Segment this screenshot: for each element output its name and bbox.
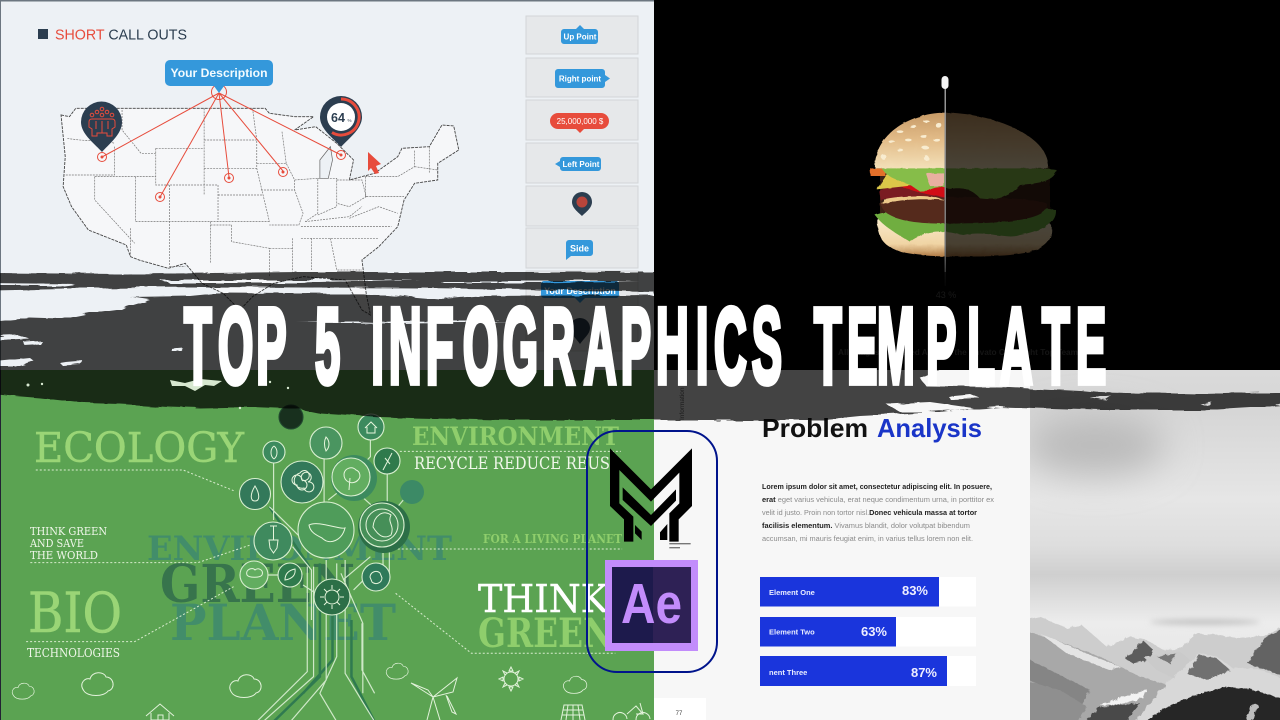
- icon: bicycle: [613, 703, 650, 720]
- logo frame: [587, 431, 717, 672]
- panel: problem analysis slide: [654, 370, 1280, 720]
- burger dimmed half: [946, 100, 1070, 270]
- callout: up point: Up Point: [564, 32, 597, 42]
- page number tab: 77: [676, 711, 683, 717]
- ghost text: GREEN: [160, 554, 355, 615]
- heading: short call outs: SHORT CALL OUTS: [55, 28, 187, 44]
- vertical information label: Information: [679, 387, 686, 420]
- callout: 25,000,000 dollars: [550, 113, 609, 133]
- callout: 25,000,000 dollars: 25,000,000 $: [557, 117, 604, 126]
- callout: left point: [555, 157, 601, 171]
- heading: bio: BIO: [28, 581, 122, 645]
- US map: [61, 108, 459, 315]
- ghost text: ENVIRONMENT: [147, 529, 452, 569]
- heading: think green: GREEN: [478, 610, 613, 657]
- heading: problem analysis: Problem: [762, 413, 868, 443]
- icon: wind turbine: [411, 678, 457, 720]
- decorative clouds and icons: [12, 663, 650, 720]
- icon: 64 percent pin: [320, 96, 362, 147]
- callout: your description: Your Description: [170, 66, 268, 80]
- icon: house: [146, 704, 174, 720]
- faint caption: All Images Rendered Against the Envato Copyright Top Team: [838, 348, 1078, 357]
- callout: your description sample: [541, 281, 619, 303]
- icon: covered pin: [570, 318, 590, 344]
- tree glyph icons: [247, 422, 398, 609]
- text: think green and save the world: AND SAVE: [29, 537, 84, 550]
- pale torn flecks on green: [26, 379, 289, 409]
- panel: callout samples: [526, 16, 638, 351]
- callout: side: [566, 240, 593, 260]
- text: technologies: TECHNOLOGIES: [27, 646, 120, 660]
- heading: environment: ENVIRONMENT: [412, 422, 619, 451]
- torn dark brush band: [0, 272, 1280, 420]
- callout: right point: [555, 69, 610, 88]
- tree trunk circuit lines: [257, 440, 406, 720]
- ghost text: [147, 529, 452, 652]
- callout: side: Side: [570, 244, 589, 254]
- bar: element one 83%: 83%: [902, 583, 928, 598]
- bar: element three 87%: 87%: [911, 665, 937, 680]
- photo: snowy mountains: [1023, 370, 1280, 720]
- logo: double M: [610, 448, 692, 548]
- icon: red cursor: [368, 152, 381, 174]
- bar: element three 87%: nent Three: [769, 668, 807, 677]
- text: recycle reduce reuse: RECYCLE REDUCE REUS: [414, 454, 610, 474]
- text block: lorem ipsum: accumsan, mi mauris feugiat enim, in varius tellus lorem non elit.: [762, 534, 973, 543]
- bar: element three 87%: [760, 656, 976, 686]
- title: top 5 infographics template: TOP 5 INFOGRAPHICS TEMPLATE: [184, 285, 1106, 406]
- logo: after effects: [605, 560, 698, 651]
- heading: problem analysis: [762, 413, 982, 443]
- text block: lorem ipsum: facilisis elementum. Vivamus blandit, dolor volutpat bibendum: [762, 521, 970, 530]
- text block: lorem ipsum: erat eget varius vehicula, erat neque condimentum urna, in porttitor ex: [762, 495, 994, 504]
- bar: element one 83%: Element One: [769, 588, 815, 597]
- panel: green ecology: [0, 370, 654, 720]
- logo: after effects: Ae: [621, 572, 682, 636]
- heading: ecology: ECOLOGY: [34, 424, 245, 472]
- callout: up point: [561, 25, 598, 44]
- panel: short call outs map: [0, 0, 654, 370]
- text: think green and save the world: THINK GREEN: [30, 525, 107, 538]
- map target markers: [98, 150, 346, 202]
- bar: element two 63%: [760, 617, 976, 646]
- text: think green and save the world: [29, 525, 107, 562]
- tree icon circles: [240, 405, 424, 615]
- ghost text: PLANET: [170, 593, 396, 652]
- burger image: [870, 113, 1057, 257]
- callout: your description sample: Your Description: [544, 286, 616, 296]
- page number tab: [654, 698, 706, 720]
- icon: 64 percent pin: %: [347, 118, 352, 123]
- text: think green and save the world: THE WORLD: [30, 549, 98, 562]
- bar: element two 63%: 63%: [861, 624, 887, 639]
- heading: think green: THINK: [478, 577, 609, 621]
- bar: element one 83%: [760, 577, 976, 606]
- bar chart: [760, 577, 976, 686]
- text block: lorem ipsum: [762, 482, 994, 543]
- dotted leader lines: [26, 451, 622, 653]
- slider percent label: 43 %: [936, 290, 956, 300]
- text: for a living planet: FOR A LIVING PLANET: [483, 532, 622, 546]
- icon: 64 percent pin: 64: [331, 111, 345, 125]
- panel: burger slider: [654, 0, 1280, 370]
- icon: sun: [499, 667, 523, 691]
- icon: small pin: [572, 192, 592, 216]
- icon: people pin: [81, 102, 122, 152]
- bar: element two 63%: Element Two: [769, 628, 815, 636]
- callout: right point: Right point: [559, 74, 601, 84]
- heading: problem analysis: Analysis: [877, 413, 982, 443]
- icon: solar panel: [561, 705, 585, 720]
- slider line: [942, 76, 948, 286]
- icon: clouds: [12, 663, 587, 699]
- callout: left point: Left Point: [563, 160, 600, 169]
- heading: think green: [478, 577, 613, 657]
- callout: your description: [165, 60, 273, 93]
- text block: lorem ipsum: Lorem ipsum dolor sit amet, consectetur adipiscing elit. In posuere,: [762, 482, 992, 491]
- text block: lorem ipsum: velit id justo. Proin non tortor nisl.Donec vehicula massa at tortor: [762, 508, 977, 517]
- connector lines: [102, 84, 341, 197]
